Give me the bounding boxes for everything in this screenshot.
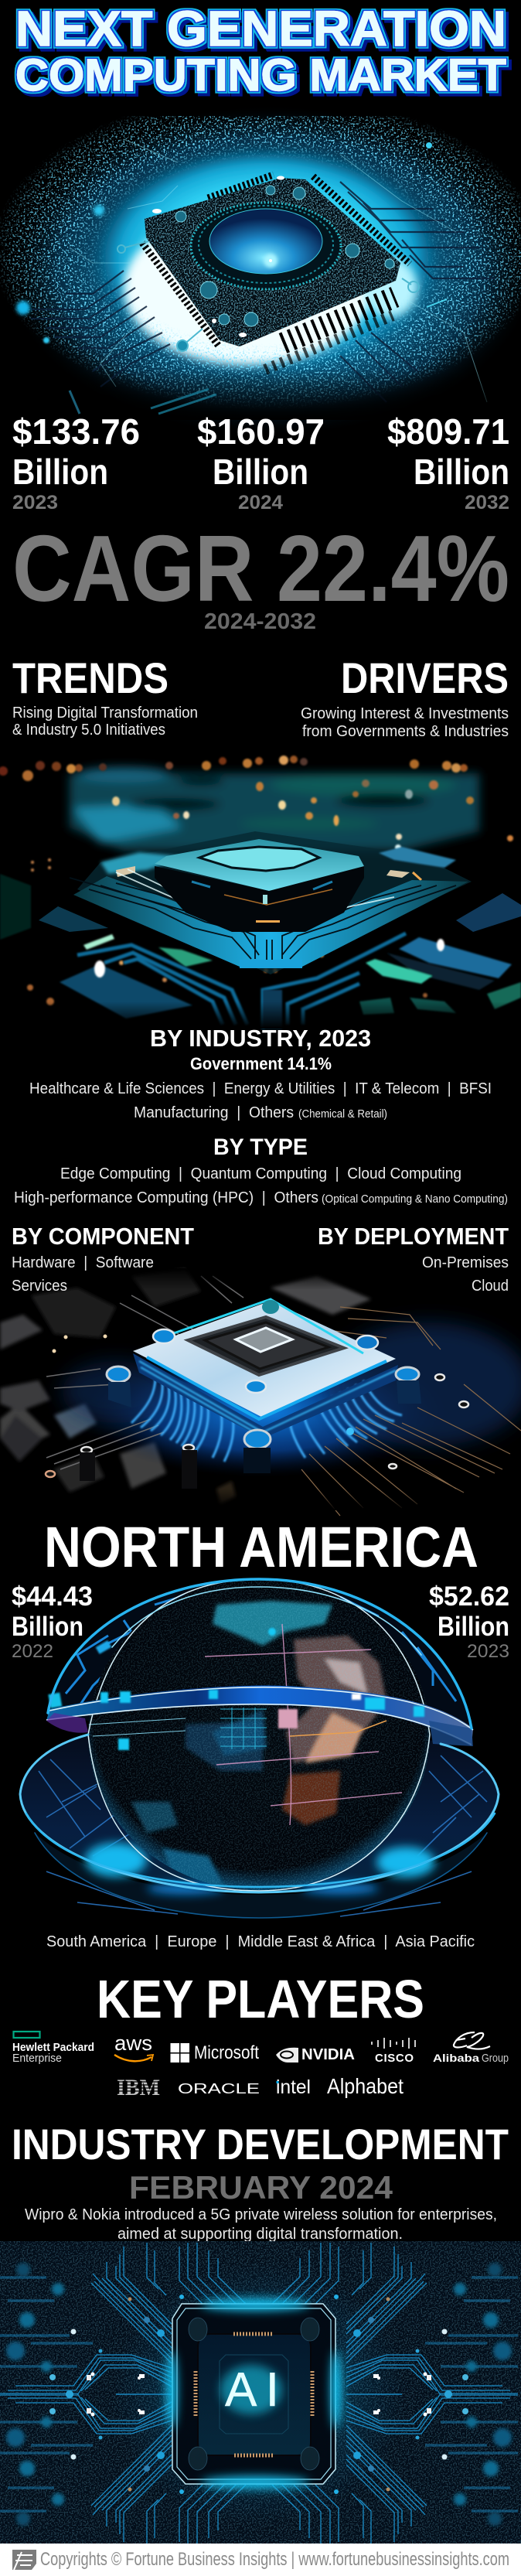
stat: north america 2023: $52.62: [429, 1581, 509, 1612]
by industry: [29, 1025, 492, 1121]
logo: Alibaba Group: [433, 2032, 509, 2065]
logo: Oracle: ORACLE: [178, 2081, 260, 2097]
by type: [14, 1134, 508, 1206]
stat: 2023 market size: [12, 411, 140, 513]
illustration: teal circuit board chip: [0, 756, 521, 1029]
stat: 2032 market size: [387, 411, 509, 513]
logo: NVIDIA: [276, 2046, 355, 2063]
stat: 2024 market size: Billion: [213, 452, 308, 492]
by type: BY TYPE: [213, 1134, 308, 1160]
logo: Intel: intel: [276, 2076, 311, 2098]
components and deployment panels: BY COMPONENT: [12, 1223, 194, 1250]
logo: Alibaba Group: Alibaba: [433, 2052, 479, 2064]
key players heading: KEY PLAYERS: [97, 1969, 424, 2029]
icon: Fortune Business Insights logo: [12, 2550, 36, 2570]
stat: north america 2022: $44.43: [12, 1581, 93, 1612]
logo: Alphabet: Alphabet: [327, 2074, 404, 2098]
logo: Microsoft: [170, 2042, 259, 2063]
by industry: Healthcare & Life Sciences | Energy & Utilities | IT & Telecom | BFSI: [29, 1080, 492, 1097]
industry development: Wipro & Nokia introduced a 5G private wireless solution for enterprises,: [25, 2206, 497, 2223]
drivers: Growing Interest & Investments: [301, 705, 509, 722]
footer bar: [0, 2544, 521, 2576]
illustration: AI chip on circuit: AI: [225, 2363, 279, 2417]
logo: IBM: IBM: [117, 2075, 160, 2100]
components and deployment panels: Services: [12, 1278, 67, 1295]
by industry: Manufacturing | Others: [134, 1104, 294, 1121]
components and deployment panels: On-Premises: [422, 1254, 509, 1271]
by type: Edge Computing | Quantum Computing | Cloud Computing: [60, 1165, 461, 1182]
components and deployment panels: Cloud: [472, 1278, 509, 1295]
illustration: blue glowing heat-sink chip: [0, 1268, 521, 1516]
drivers: [301, 653, 509, 740]
stat: north america 2022: Billion: [12, 1612, 83, 1642]
illustration: AI chip on circuit: [0, 2241, 521, 2546]
region heading: NORTH AMERICA: [44, 1515, 478, 1579]
stat: 2023 market size: $133.76: [12, 411, 140, 452]
stat: north america 2022: 2022: [12, 1641, 53, 1662]
stat: 2032 market size: $809.71: [387, 411, 509, 452]
other regions: South America | Europe | Middle East & Africa | Asia Pacific: [46, 1933, 475, 1950]
logo: Hewlett Packard Enterprise: [12, 2032, 94, 2065]
logo: Cisco: [372, 2038, 415, 2065]
by industry: Government 14.1%: [190, 1054, 332, 1073]
trends: TRENDS: [12, 653, 169, 702]
stat: 2023 market size: Billion: [12, 452, 108, 492]
stat: north america 2022: [12, 1581, 93, 1662]
stat: 2032 market size: 2032: [465, 492, 509, 513]
logo: Hewlett Packard Enterprise: Enterprise: [12, 2052, 62, 2065]
by type: High-performance Computing (HPC) | Others: [14, 1189, 318, 1206]
industry development: FEBRUARY 2024: [129, 2169, 393, 2206]
components and deployment panels: [12, 1223, 509, 1295]
by industry: (Chemical & Retail): [298, 1107, 387, 1121]
components and deployment panels: Hardware | Software: [12, 1254, 154, 1271]
trends: [12, 653, 198, 739]
logo: Hewlett Packard Enterprise: Hewlett Packard: [12, 2041, 94, 2054]
trends: Rising Digital Transformation: [12, 705, 198, 722]
drivers: from Governments & Industries: [302, 723, 509, 740]
industry development: [12, 2120, 509, 2243]
stat: 2023 market size: 2023: [12, 492, 58, 513]
stat: north america 2023: 2023: [467, 1641, 509, 1662]
logo: Cisco: CISCO: [375, 2052, 414, 2065]
stat: north america 2023: [429, 1581, 509, 1662]
title: NEXT GENERATION: [15, 1, 506, 56]
CAGR headline: 2024-2032: [204, 609, 316, 634]
title: [15, 1, 506, 101]
title: COMPUTING MARKET: [15, 50, 506, 101]
by type: (Optical Computing & Nano Computing): [322, 1192, 508, 1206]
stat: 2024 market size: [197, 411, 325, 513]
logo: AWS: aws: [114, 2032, 152, 2055]
illustration: glowing processor chip: [0, 104, 521, 437]
industry development: aimed at supporting digital transformation.: [117, 2226, 403, 2243]
stat: 2024 market size: 2024: [238, 492, 283, 513]
trends: & Industry 5.0 Initiatives: [12, 722, 165, 739]
illustration: digital globe: [20, 1578, 499, 1918]
stat: 2032 market size: Billion: [414, 452, 509, 492]
by industry: BY INDUSTRY, 2023: [150, 1025, 371, 1052]
logo: Microsoft: Microsoft: [194, 2042, 259, 2063]
stat: north america 2023: Billion: [438, 1612, 509, 1642]
logo: NVIDIA: NVIDIA: [301, 2046, 355, 2063]
stat: 2024 market size: $160.97: [197, 411, 325, 452]
logo: Alibaba Group: Group: [482, 2052, 509, 2065]
components and deployment panels: BY DEPLOYMENT: [318, 1223, 509, 1250]
